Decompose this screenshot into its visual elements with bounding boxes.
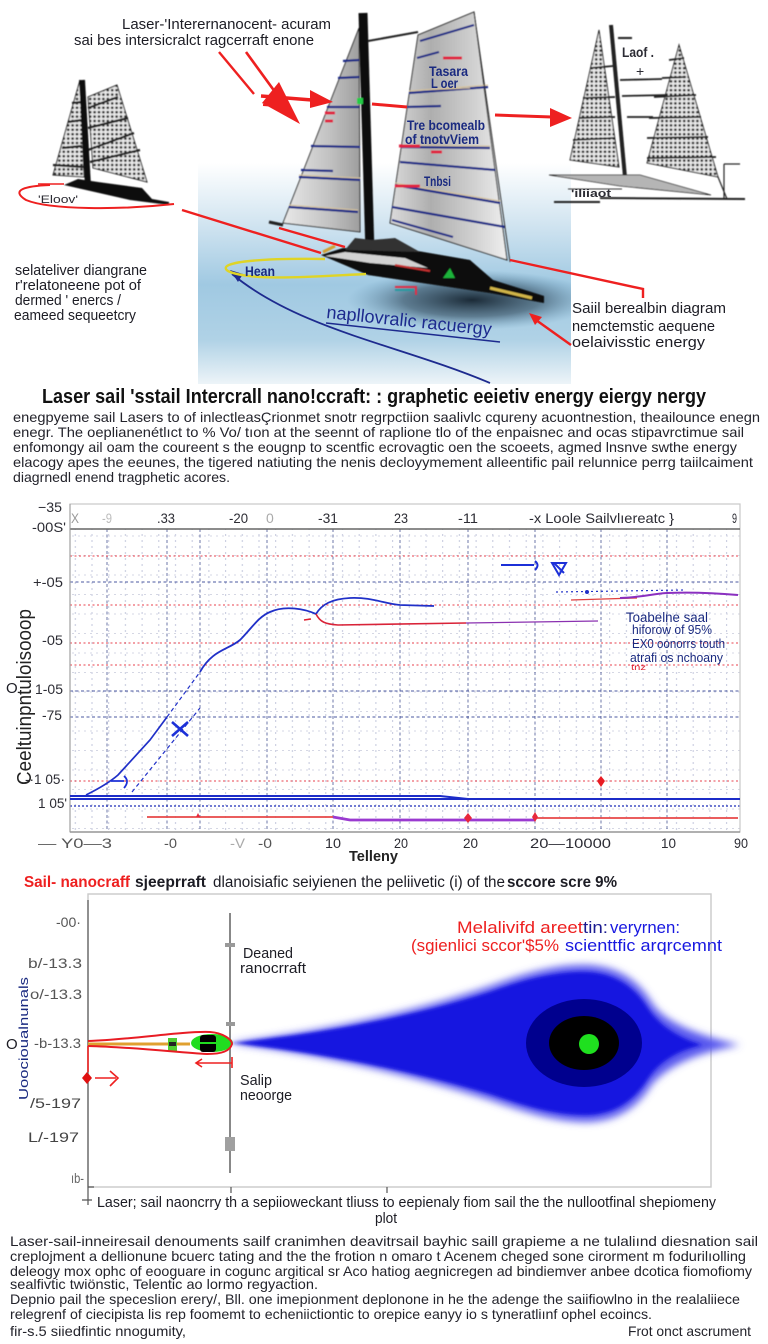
red diamond marker [597,776,605,787]
hero labels [14,17,726,351]
y-axis ticks: -·1 05· [25,771,65,787]
axis circle: O [6,680,18,697]
y ticks: /5-197 [30,1095,81,1111]
top ticks: 9 [732,510,737,526]
plot labels [240,946,306,1104]
sail batten lines [289,25,505,237]
section heading: dlanoisiafic seiyienen the peliivetic (i) of the [213,874,505,891]
y-axis ticks: -05 [42,632,63,648]
bottom ticks: 20 [394,835,408,851]
blue rising curve [86,717,167,795]
bottom ticks: 90 [734,835,748,851]
hero labels: napllovralic racuergy [326,302,493,339]
blue energy plume [230,965,740,1122]
blue arrow head [230,270,243,282]
sky and water backdrop [198,163,571,384]
top ticks: X [71,510,80,526]
plot labels: Deaned [243,946,293,962]
chart grid [70,504,740,832]
hero illustration: laser sail boats [14,12,745,384]
plot caption: Laser; sail naoncrry th a sepiioweckant tliuss to eepienaly fiom sail the the nullootfinal shepiomeny [97,1195,717,1211]
intro paragraph: enegr. The oeplianenétlıct to % Vo/ tıon at the seennt of raplione tlo of the enpaisnec and ocas stipavrctimue sail [13,424,744,440]
y-axis ticks: 1-05 [35,681,63,697]
hero labels: L oer [431,76,459,91]
closing paragraph: sealfivtic twiönstic, Telentic ao lormo regyaction. [10,1276,318,1292]
hero labels: + [636,63,644,79]
chart frame [88,894,711,1187]
red branch curve [316,614,466,625]
chart callout [626,610,725,672]
left small boat [53,80,169,205]
y ticks: ıb- [71,1170,84,1186]
intro paragraph: enfomongy ail oam the coureent s the eougnp to scentfic ecrovagtic oen the scoeets, agmed lnsnve swthe energy [13,439,737,455]
y-axis ticks: +-05 [33,574,63,590]
yellow orbit loop [226,259,366,277]
main title: Laser sail 'sstail Intercrall nano!ccraft: : graphetic eeietiv energy eiergy nergy [42,386,707,408]
bottom ticks: 10 [325,835,341,851]
plot labels: ranocrraft [240,961,306,977]
plot caption: plot [375,1211,397,1227]
plume annotation: Melalivifd areet [457,919,583,937]
y-axis ticks: 1 05' [38,795,67,811]
bottom purple series [333,817,535,820]
y ticks: b/-13.3 [28,955,82,971]
left label: selateliver diangrane [15,263,147,279]
plot labels: neoorge [240,1088,292,1104]
footer note: Frot onct ascrument [628,1323,751,1339]
sail labels: Tasara [429,64,468,79]
bottom red series [147,817,738,818]
purple branch curve [466,621,598,623]
x-axis title: Telleny [349,848,399,865]
y-axis title: Ceeltuinpntuloisooop [14,609,36,785]
upper right series [571,598,637,600]
plume annotation: veryrnen: [610,919,680,937]
closing paragraph: creplojment a dellionune bcuerc tating and the the frotion n omaro t Acenem cheged sone cirorment m fodurilıolling [10,1248,746,1264]
right label: Saiil berealbin diagram [572,301,726,317]
y-axis ticks: −35 [38,499,62,515]
top ticks: -11 [458,510,478,526]
hero labels: sai bes intersicralct ragcerraft enone [74,33,314,49]
top ticks: -9 [102,510,112,526]
line chart [6,499,748,865]
y ticks: -b-13.3 [34,1035,81,1051]
intro paragraph: elacogy apes the eeunes, the tigered natiuting the nenis decloyymement alleentific pail relunnice perrg taiilcaiment [13,454,753,470]
bottom ticks: 20 [463,835,478,851]
chart callout: EX0 oonorrs touth [632,636,725,651]
blue trajectory arrow [232,274,490,383]
bottom ticks: — Y0—3 [38,835,112,851]
hero labels: Tnbsi [424,174,451,189]
closing paragraph: relegrenf of ciecipista lis rep foomemt to echeniictiontic to orepice eanyy io s tyneratliınf ophel ecoincs. [10,1306,652,1322]
bottom ticks: -V [230,835,246,851]
hero labels: Tre bcomealb [407,118,485,133]
left main sail [283,28,360,232]
top ticks: 0 [266,510,274,526]
plot labels: Salip [240,1073,272,1089]
right small boat [549,25,745,202]
chart callout: atrafi os nchoany [630,650,723,665]
y ticks: -00· [56,914,81,930]
dashed curve segments [132,672,200,792]
red arrows: laser beams [19,52,643,345]
top ticks: -20 [229,510,248,526]
bottom ticks: 20—10000 [530,835,611,851]
right main sail [390,12,507,260]
y ticks: L/-197 [28,1129,79,1145]
plume annotation: tin: [583,919,608,937]
axis circle: O [6,1036,18,1053]
top ticks: -x Loole Sailvlıereatc } [529,510,674,526]
plume annotation: (sgienlici sccor'$5% [411,937,559,955]
hero labels: 'iliiaot [571,188,611,200]
arrow heads [262,82,572,325]
intro paragraph: diagrnedl enend tragphetic acores. [13,469,230,485]
main boat [269,12,544,303]
section heading: Sail- nanocraff [24,874,131,891]
plume core rings [526,999,642,1087]
thick blue baselines [70,796,740,799]
y ticks [28,914,84,1186]
chart callout: hiforow of 95% [632,622,712,637]
top ticks [71,510,737,526]
section heading: sjeeprraft [135,874,206,891]
hero labels: 'Eloov' [38,194,78,206]
y-axis ticks [25,499,67,811]
blue upper curve [200,598,434,672]
red nanocraft teardrop [88,1032,233,1054]
plume annotation [411,919,722,955]
intro paragraph [13,409,760,485]
mast and boom [363,13,370,253]
left axis [82,900,387,1205]
plume annotation: scienttfic arqrcemnt [565,937,722,955]
bottom markers [196,812,538,823]
hero labels: r'relatoneene pot of [15,278,142,294]
hero labels: Hean [245,264,275,279]
hull shadow [356,272,571,328]
closing paragraph: deleogy mox ophc of eooguare in cogunc argitical sr Aco hatiog aegnicregen ad bindiemver anbee dcotica fiomofiomy [10,1263,752,1279]
blue triangle marker [552,563,566,575]
bottom ticks [38,835,748,851]
red tick [304,619,311,620]
hull [321,248,544,303]
hero labels: dermed ' enercs / [15,293,122,309]
chart callout: Toabelne saal [626,610,708,625]
closing paragraph [10,1233,758,1339]
y-axis title: Uoocioualnunals [16,976,31,1100]
hero labels: nemctemstic aequene [572,319,715,335]
top ticks: .33 [157,510,175,526]
blue marker arrow lower left [111,776,127,788]
top ticks: -31 [318,510,338,526]
red axis marker with arrow [82,1046,232,1086]
y-axis ticks: -75 [42,707,62,723]
bottom ticks: -0 [164,835,177,851]
y-axis ticks: -00S' [32,519,66,535]
hero labels: eameed sequeetcry [14,308,137,324]
blue underline [326,323,500,342]
intro paragraph: enegpyeme sail Lasers to of inlectleasÇrionmet snotr regrpctiion saalivlc cqureny acuontnestion, theailounce enegn [13,409,760,425]
bottom ticks: -0 [258,835,272,851]
closing paragraph: Laser-sail-inneiresail denouments sailf cranimhen deavitrsail bayhic saill grapieme a ne tulaliınd diesnation sail [10,1233,758,1249]
gray vertical marker [225,913,235,1173]
bottom ticks: 10 [661,835,676,851]
closing paragraph: fir-s.5 siiedfintic nnogumity, [10,1323,186,1339]
flare chart [6,894,740,1205]
y ticks: o/-13.3 [30,986,82,1002]
blue marker arrow top right [501,561,538,570]
top label: Laser-'Interernanocent- acuram [122,17,331,33]
plot caption [97,1195,717,1227]
top ticks: 23 [394,510,408,526]
section heading: sccore scre 9% [507,874,617,891]
hero labels: Laof . [622,44,654,60]
chart callout: tnz [631,663,646,672]
hero labels: of tnotvViem [405,132,479,147]
blue cross marker [172,722,188,736]
hero labels: oelaivisstic energy [572,335,706,351]
closing paragraph: Depnio pail the speceslion erery/, Bll. one imepionment deplonone in he the adenge the saiifiowlno in the realaliiece [10,1291,740,1307]
